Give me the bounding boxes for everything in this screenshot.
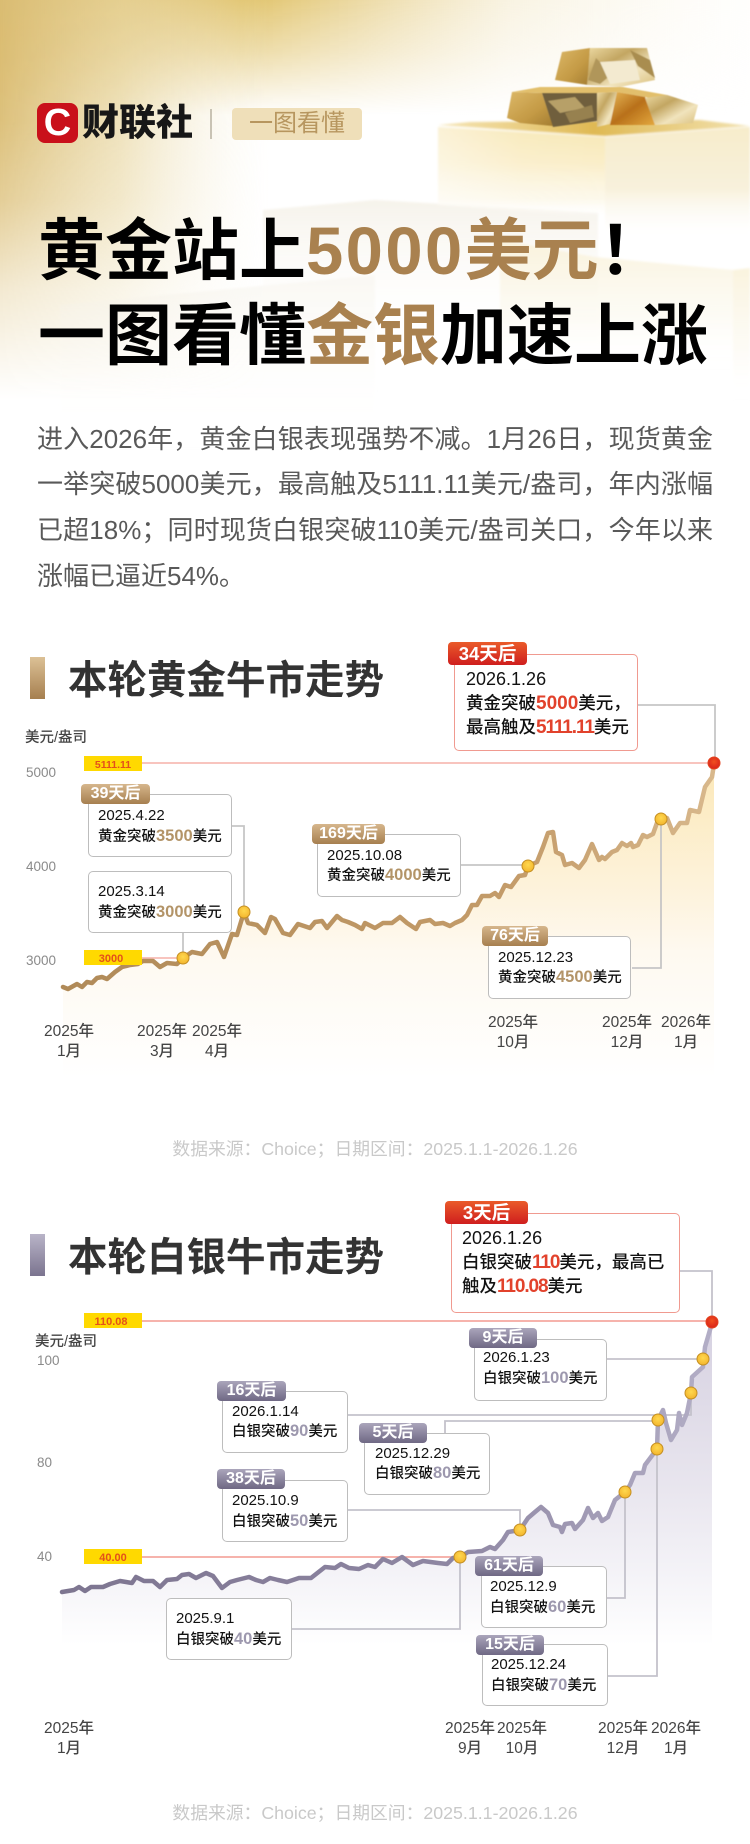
callout: 39 days later: 2025.4.22 — [98, 807, 165, 824]
callout: 5 days later — [359, 1423, 490, 1495]
icon: red C badge — [37, 103, 78, 143]
callout: 38 days later — [217, 1469, 348, 1542]
x axis labels: 12月 — [611, 1034, 643, 1051]
source note: gold: 数据来源：Choice；日期区间：2025.1.1-2026.1.26 — [172, 1139, 578, 1159]
x axis labels: 2026年 — [651, 1719, 701, 1737]
callout: 38 days later: 38天后 — [226, 1470, 276, 1487]
y axis values: 100 — [37, 1353, 60, 1368]
callout: 2025.3.14 — [88, 871, 232, 933]
title line 2: 一图看懂金银加速上涨 — [38, 299, 708, 374]
heading marker bar — [30, 1234, 45, 1276]
callout: 15 days later: 白银突破70美元 — [491, 1676, 596, 1694]
x axis labels: 2025年 — [192, 1022, 242, 1040]
callout: 3 days later: 触及110.08美元 — [462, 1276, 582, 1297]
callout: 16 days later: 16天后 — [227, 1382, 276, 1399]
yellow tag 5111.11: 5111.11 — [95, 759, 131, 771]
y axis unit: 美元/盎司 — [25, 728, 87, 746]
brand name: 财联社 — [82, 102, 193, 143]
callout: 5 days later: 白银突破80美元 — [375, 1464, 480, 1482]
y axis unit: 美元/盎司 — [35, 1332, 97, 1350]
callout: 15 days later: 2025.12.24 — [491, 1656, 566, 1673]
callout: 9 days later: 2026.1.23 — [483, 1349, 550, 1366]
reference lines — [142, 763, 714, 958]
callout: 169 days later: 2025.10.08 — [327, 847, 402, 864]
callout: 38 days later: 白银突破50美元 — [232, 1512, 337, 1530]
x axis labels: 2025年 — [44, 1022, 94, 1040]
callout: 34 days later — [448, 642, 638, 751]
x axis labels: 10月 — [497, 1034, 529, 1051]
gold price line — [63, 764, 714, 989]
heading text: 本轮白银牛市走势 — [68, 1236, 384, 1280]
heading: gold trend — [30, 657, 384, 703]
callout: 2025.9.1 — [166, 1598, 292, 1660]
icon: gold ingots — [507, 48, 698, 127]
callout: 76 days later: 黄金突破4500美元 — [498, 968, 622, 986]
logo: 财联社 — [37, 102, 193, 144]
y axis values: 80 — [37, 1455, 52, 1470]
callout: 39 days later — [81, 784, 232, 857]
callout: 34 days later: 2026.1.26 — [466, 669, 546, 689]
callout: 76 days later — [482, 926, 631, 999]
callout: 9 days later: 9天后 — [483, 1329, 523, 1346]
callout: 38 days later: 2025.10.9 — [232, 1492, 299, 1509]
silver price line — [62, 1323, 712, 1592]
chart: silver price line — [35, 1270, 718, 1757]
callout: 15 days later: 15天后 — [485, 1636, 535, 1653]
x axis labels: 2026年 — [661, 1013, 711, 1031]
connector lines — [183, 705, 715, 968]
callout: 9 days later: 白银突破100美元 — [483, 1369, 598, 1387]
tag: 一图看懂: 一图看懂 — [249, 110, 345, 137]
callout: 3 days later: 白银突破110美元，最高已 — [462, 1252, 664, 1273]
x axis labels: 9月 — [458, 1740, 482, 1757]
x axis labels: 12月 — [607, 1740, 639, 1757]
callout: 3 days later: 3天后 — [463, 1202, 510, 1223]
callout: 34 days later: 34天后 — [459, 643, 516, 664]
x axis labels: 3月 — [150, 1043, 174, 1060]
heading: silver trend — [30, 1234, 384, 1280]
x axis labels: 2025年 — [445, 1719, 495, 1737]
x axis labels: 2025年 — [598, 1719, 648, 1737]
callout: 34 days later: 最高触及5111.11美元 — [466, 717, 629, 738]
intro paragraph: 涨幅已逼近54%。 — [37, 561, 245, 591]
callout: 76 days later: 2025.12.23 — [498, 949, 573, 966]
markers — [454, 1316, 718, 1563]
x axis labels: 2025年 — [497, 1719, 547, 1737]
connector lines — [292, 1271, 712, 1676]
yellow tag 3000: 3000 — [99, 953, 123, 965]
x axis labels: 1月 — [674, 1034, 698, 1051]
y axis values — [37, 1353, 60, 1564]
chart: gold price line — [25, 704, 720, 1060]
yellow tag 5111.11 — [84, 756, 142, 771]
callout: 34 days later: 黄金突破5000美元， — [466, 693, 631, 714]
pedestal blocks — [60, 120, 750, 450]
callout: 3 days later: 2026.1.26 — [462, 1228, 542, 1248]
yellow tag 40.00 — [84, 1549, 142, 1564]
x axis labels: 1月 — [664, 1740, 688, 1757]
callout: 39 days later: 黄金突破3500美元 — [98, 827, 222, 845]
intro paragraph: 一举突破5000美元，最高触及5111.11美元/盎司，年内涨幅 — [37, 469, 713, 499]
intro paragraph: 进入2026年，黄金白银表现强势不减。1月26日，现货黄金 — [37, 424, 713, 454]
callout: 169 days later: 黄金突破4000美元 — [327, 866, 451, 884]
yellow tag 3000 — [84, 950, 142, 965]
heading text: 本轮黄金牛市走势 — [68, 659, 384, 703]
title — [38, 214, 708, 374]
x axis labels: 2025年 — [488, 1013, 538, 1031]
callout: 39 days later: 39天后 — [91, 785, 140, 802]
x axis labels: 10月 — [506, 1740, 538, 1757]
x axis labels — [44, 1013, 711, 1060]
callout: 16 days later: 2026.1.14 — [232, 1403, 299, 1420]
yellow tag 110.08: 110.08 — [94, 1316, 128, 1328]
area under gold line — [63, 764, 714, 1078]
yellow tag 110.08 — [84, 1313, 142, 1328]
callout: 5 days later: 2025.12.29 — [375, 1445, 450, 1462]
y axis values: 40 — [37, 1549, 52, 1564]
callout: 15 days later — [476, 1635, 608, 1706]
area under silver line — [62, 1323, 712, 1645]
callout: 61 days later: 2025.12.9 — [490, 1578, 557, 1595]
callout: 3 days later — [445, 1201, 680, 1313]
x axis labels: 1月 — [57, 1043, 81, 1060]
callout: 2025.9.1: 2025.9.1 — [176, 1610, 234, 1627]
header background with gold gradient and ingots — [0, 0, 750, 380]
x axis labels: 2025年 — [44, 1719, 94, 1737]
callout: 9 days later — [469, 1328, 607, 1401]
reference lines — [142, 1321, 712, 1557]
callout: 76 days later: 76天后 — [490, 927, 540, 944]
callout: 5 days later: 5天后 — [373, 1424, 413, 1441]
callout: 16 days later — [217, 1381, 348, 1453]
callout: 16 days later: 白银突破90美元 — [232, 1422, 337, 1440]
callout: 169 days later: 169天后 — [319, 825, 378, 842]
x axis labels: 2025年 — [137, 1022, 187, 1040]
heading marker bar — [30, 657, 45, 699]
y axis values: 4000 — [26, 859, 56, 874]
intro paragraph: 已超18%；同时现货白银突破110美元/盎司关口，今年以来 — [37, 515, 713, 545]
x axis labels — [44, 1719, 701, 1757]
callout: 2025.9.1: 白银突破40美元 — [176, 1630, 281, 1648]
callout: 169 days later — [312, 824, 461, 897]
callout: 2025.3.14: 黄金突破3000美元 — [98, 903, 222, 921]
y axis values: 3000 — [26, 953, 56, 968]
callout: 2025.3.14: 2025.3.14 — [98, 883, 165, 900]
icon: red C badge: C — [44, 102, 71, 144]
callout: 61 days later: 白银突破60美元 — [490, 1598, 595, 1616]
yellow tag 40.00: 40.00 — [99, 1552, 127, 1564]
intro paragraph — [37, 424, 713, 591]
callout: 61 days later: 61天后 — [484, 1557, 534, 1574]
x axis labels: 1月 — [57, 1740, 81, 1757]
x axis labels: 2025年 — [602, 1013, 652, 1031]
callout: 61 days later — [475, 1556, 607, 1628]
tag: 一图看懂 — [232, 108, 362, 140]
y axis values: 5000 — [26, 765, 56, 780]
markers — [177, 757, 720, 964]
title line 1: 黄金站上5000美元！ — [38, 214, 666, 289]
y axis values — [26, 765, 56, 968]
source note: silver: 数据来源：Choice；日期区间：2025.1.1-2026.1.26 — [172, 1803, 578, 1823]
x axis labels: 4月 — [205, 1043, 229, 1060]
